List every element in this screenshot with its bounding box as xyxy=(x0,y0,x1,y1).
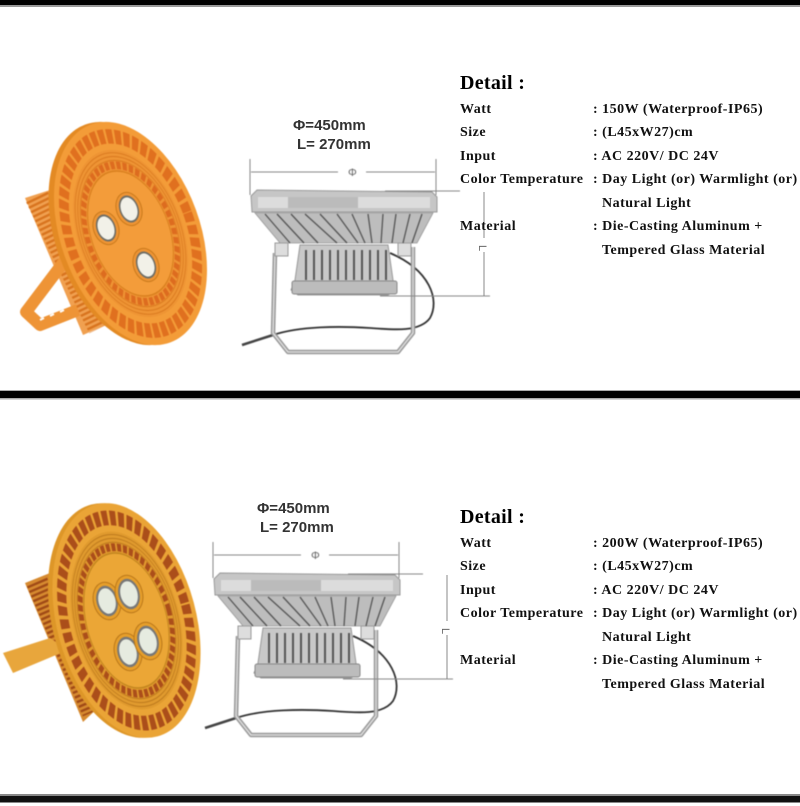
height dimension arrow: 150W: L xyxy=(476,245,488,251)
dimension drawing: 200W xyxy=(205,542,453,735)
spec rows: Color Temperature xyxy=(460,172,583,187)
LED modules xyxy=(111,189,147,229)
heading: Detail : xyxy=(460,72,525,94)
dimension labels: 200W: L= 270mm xyxy=(260,519,334,536)
dimension labels: 150W xyxy=(293,117,371,153)
top black band xyxy=(0,0,800,7)
height dimension arrow: 200W xyxy=(439,575,451,679)
height dimension arrow: 200W: L xyxy=(439,628,451,634)
spec rows: : (L45xW27)cm xyxy=(593,125,693,140)
middle black band xyxy=(0,390,800,400)
spec rows: Size xyxy=(460,559,486,574)
spec rows: : Die-Casting Aluminum + xyxy=(593,653,763,668)
product photo: 150W orange lamp xyxy=(20,101,236,366)
spec rows: Size xyxy=(460,125,486,140)
spec rows: Material xyxy=(460,653,516,668)
spec rows: : AC 220V/ DC 24V xyxy=(593,583,719,598)
bottom black band xyxy=(0,794,800,803)
spec rows xyxy=(460,536,798,692)
spec rows: Color Temperature xyxy=(460,606,583,621)
spec rows: Input xyxy=(460,583,496,598)
spec rows xyxy=(460,102,798,258)
spec rows: : 200W (Waterproof-IP65) xyxy=(593,536,763,551)
spec rows: Natural Light xyxy=(602,196,691,211)
spec rows: Tempered Glass Material xyxy=(602,677,765,692)
spec rows: : 150W (Waterproof-IP65) xyxy=(593,102,763,117)
dimension labels: 200W xyxy=(257,500,334,536)
spec rows: Watt xyxy=(460,102,492,117)
spec rows: Material xyxy=(460,219,516,234)
spec rows: Watt xyxy=(460,536,492,551)
spec rows: Natural Light xyxy=(602,630,691,645)
detail text block: 200W xyxy=(460,506,798,692)
dimension labels: 150W: Φ=450mm xyxy=(293,117,366,134)
spec rows: : (L45xW27)cm xyxy=(593,559,693,574)
spec rows: : Day Light (or) Warmlight (or) xyxy=(593,606,798,621)
detail text block: 150W xyxy=(460,72,798,258)
spec rows: : AC 220V/ DC 24V xyxy=(593,149,719,164)
dimension labels: 150W: L= 270mm xyxy=(297,136,371,153)
product photo: 200W yellow-orange lamp xyxy=(3,487,225,754)
spec rows: : Die-Casting Aluminum + xyxy=(593,219,763,234)
spec rows: Tempered Glass Material xyxy=(602,243,765,258)
LED modules xyxy=(89,579,125,623)
spec rows: : Day Light (or) Warmlight (or) xyxy=(593,172,798,187)
spec rows: Input xyxy=(460,149,496,164)
dimension drawing: 150W: Φ xyxy=(348,167,357,179)
dimension labels: 200W: Φ=450mm xyxy=(257,500,330,517)
dimension drawing: 150W xyxy=(242,159,490,352)
heading: Detail : xyxy=(460,506,525,528)
height dimension arrow: 150W xyxy=(476,192,488,296)
dimension drawing: 200W: Φ xyxy=(311,550,320,562)
